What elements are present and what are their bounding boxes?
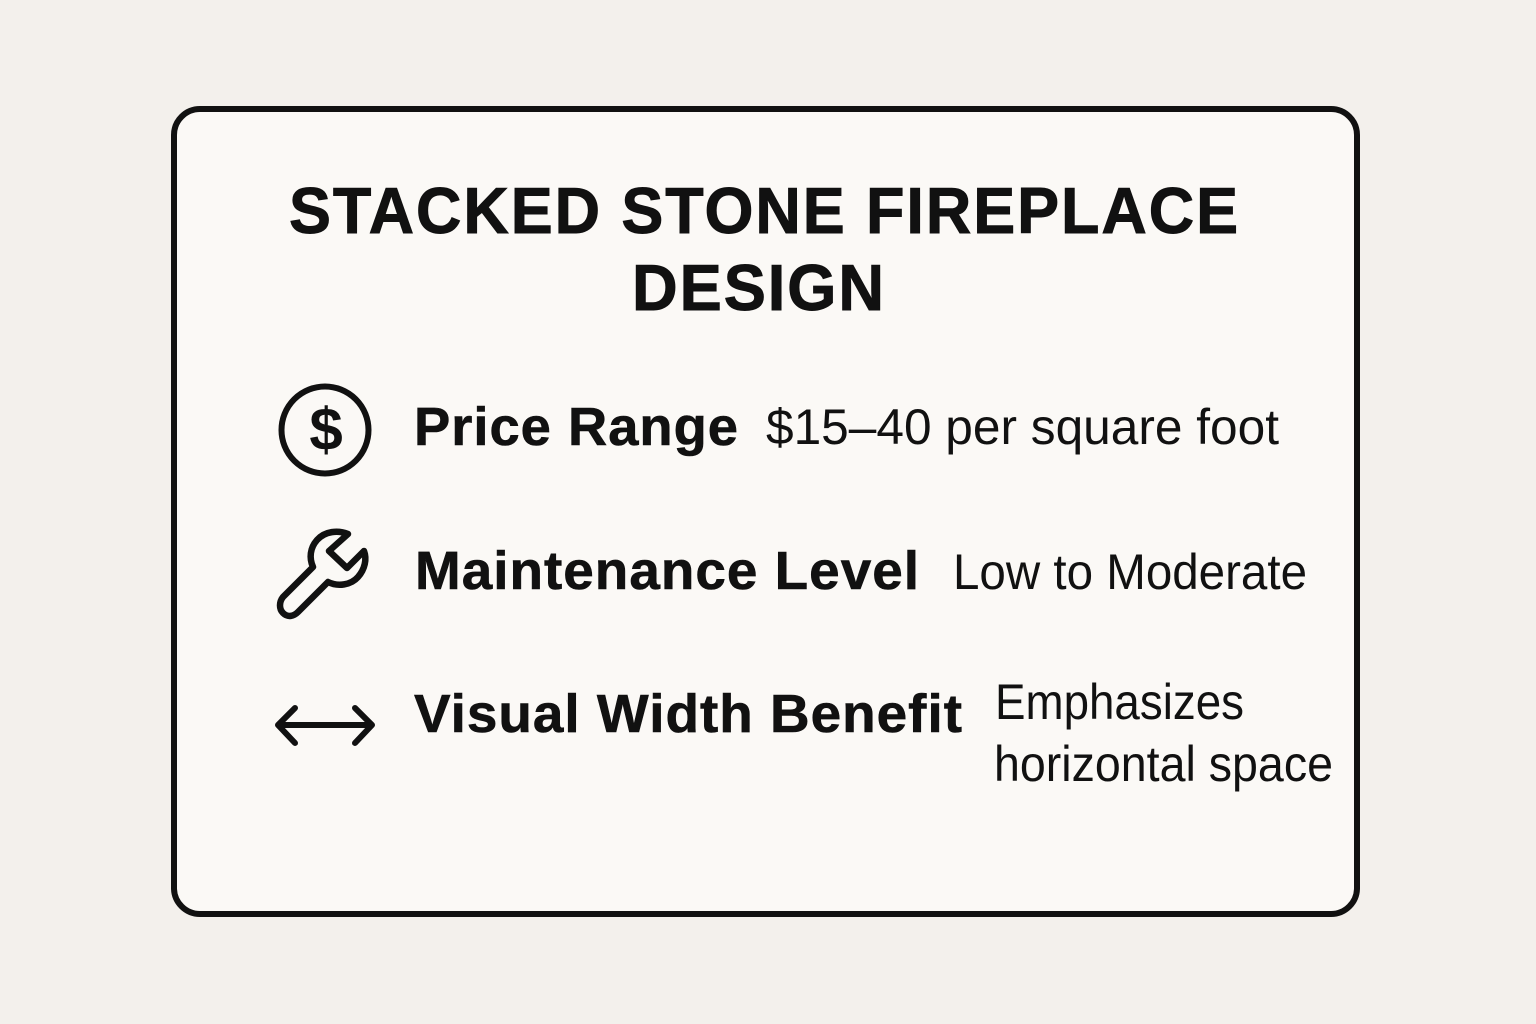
panel: card [174, 109, 1357, 914]
value: price range: $15–40 per square foot [766, 399, 1279, 455]
title: DESIGN [632, 251, 886, 324]
value: visual width benefit [994, 674, 1333, 792]
row: price range [282, 386, 1279, 474]
value: visual width benefit: horizontal space [994, 736, 1333, 792]
label: maintenance level: Maintenance Level [415, 541, 920, 601]
row: visual width benefit [278, 674, 1333, 792]
title: STACKED STONE FIREPLACE [289, 174, 1240, 247]
icon: dollar coin: $ [309, 396, 343, 463]
label: visual width benefit: Visual Width Benefit [414, 684, 963, 744]
icon: double arrow [278, 708, 372, 743]
icon: dollar coin [282, 386, 368, 474]
value: maintenance level: Low to Moderate [953, 544, 1307, 600]
title [289, 174, 1240, 324]
icon: wrench [280, 532, 365, 616]
row: maintenance level [280, 532, 1307, 616]
label: price range: Price Range [414, 397, 739, 457]
value: visual width benefit: Emphasizes [995, 674, 1244, 730]
